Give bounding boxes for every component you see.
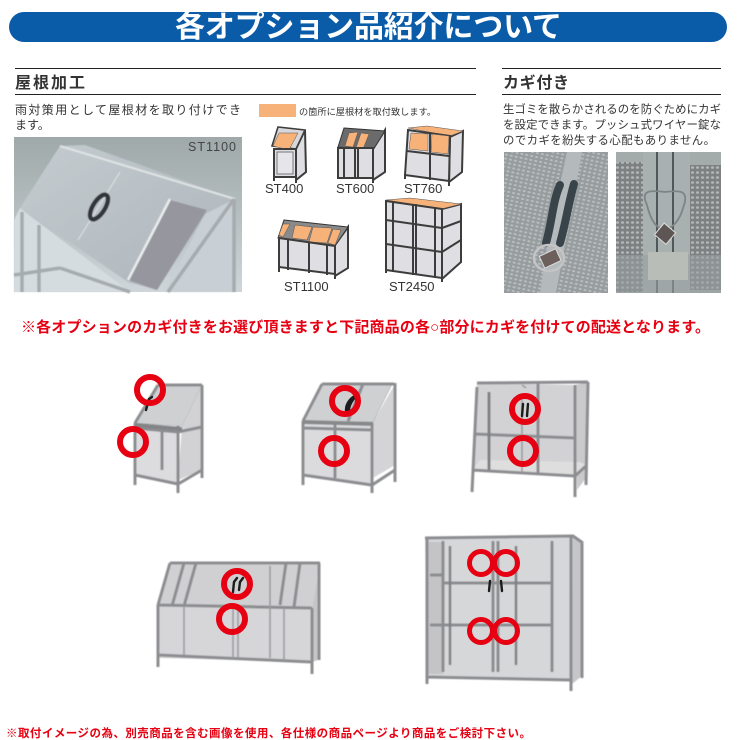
product: ST2450 with key markers [425,536,583,691]
key description text: 生ゴミを散らかされるのを防ぐためにカギ [503,102,721,116]
photo: key lock front [616,152,721,293]
product: ST600 with key markers [303,383,395,493]
key marker circles [219,571,250,632]
footnote: ※取付イメージの為、別売商品を含む画像を使用、各仕様の商品ページより商品をご検討下さい。 [6,726,531,740]
label ST2450: ST2450 [389,279,435,294]
key description text: を設定できます。プッシュ式ワイヤー錠な [503,118,721,132]
label ST600: ST600 [336,181,374,196]
roof description text: ます。 [15,118,50,132]
key marker circles [321,388,358,464]
diagram: ST2450 [386,198,461,294]
roof description text: 雨対策用として屋根材を取り付けでき [15,103,241,117]
key marker circles [120,377,163,455]
diagram: ST400 [265,127,306,196]
photo: key handles angled [504,152,608,293]
heading: roof processing: 屋根加工 [15,74,85,92]
legend: orange roof area: の箇所に屋根材を取付致します。 [299,106,436,117]
panel: with key [502,68,722,294]
label ST400: ST400 [265,181,303,196]
photo label: ST1100 [188,140,236,154]
red notice: key position: ※各オプションのカギ付きをお選び頂きますと下記商品の各○部分にカギを付けての配送となります。 [21,318,710,336]
photo: ST1100 roof [14,137,242,292]
diagram: ST760 [404,126,463,196]
diagram: ST1100 [278,220,348,294]
label ST1100: ST1100 [284,279,329,294]
key marker circles [510,396,538,464]
product: ST760 with key markers [472,382,588,497]
key description text: のでカギを紛失する心配もありません。 [503,134,715,147]
heading: with key: カギ付き [503,74,569,92]
title text: 各オプション品紹介について [175,11,562,44]
title banner [9,11,727,44]
diagram: ST600 [336,128,385,196]
product: ST400 with key markers [120,377,202,493]
legend: orange roof area [259,104,436,117]
key marker circles [470,552,518,642]
label ST760: ST760 [404,181,442,196]
panel: roof processing [14,68,476,294]
product: ST1100 with key markers [158,563,320,674]
